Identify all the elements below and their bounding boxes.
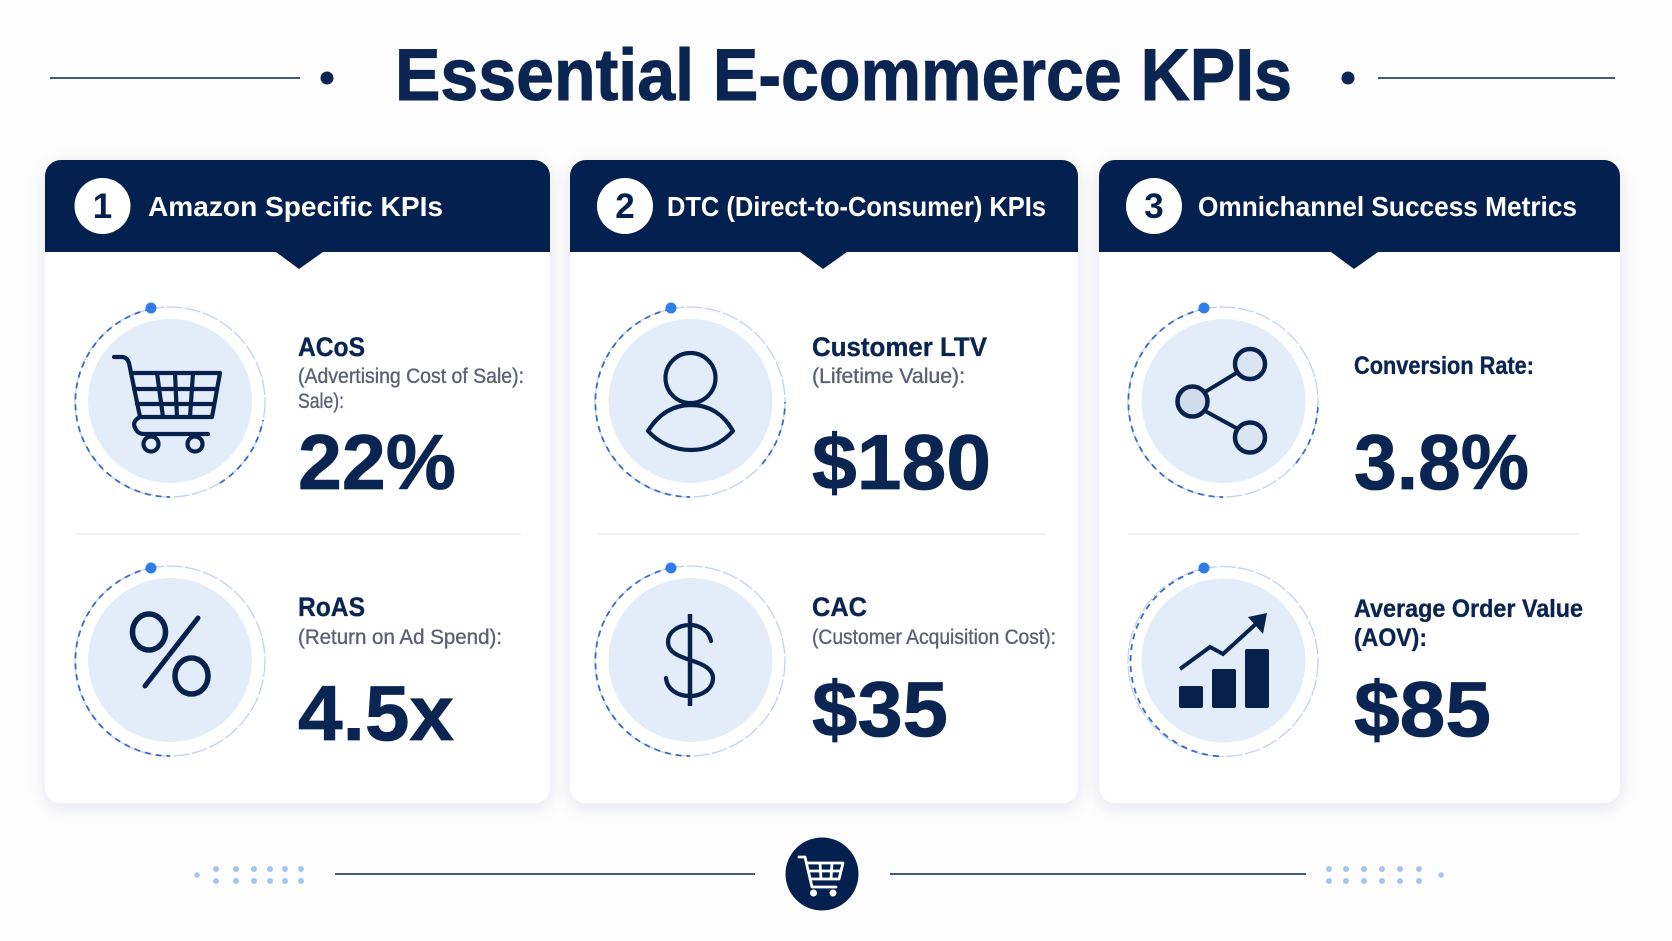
panel header: Amazon: 1: [93, 187, 112, 226]
footer decoration: [194, 838, 1444, 910]
metric: CAC: [812, 592, 1056, 753]
icon: bar chart with arrow: [1128, 562, 1318, 756]
title: [50, 35, 1615, 116]
panel header: Amazon: [45, 160, 550, 269]
icon: percent: [75, 562, 265, 756]
dots: left: [194, 866, 304, 884]
metric: ACoS: (Advertising Cost of Sale):: [298, 365, 524, 388]
panel header: Omnichannel: 3: [1144, 187, 1164, 226]
title: Essential E-commerce KPIs: [395, 35, 1292, 116]
panel header: DTC: 2: [615, 187, 635, 226]
metric: Average Order Value: [1354, 595, 1583, 753]
panel header: DTC: DTC (Direct-to-Consumer) KPIs: [667, 191, 1046, 222]
icon: footer cart badge: [786, 838, 858, 910]
metric: Average Order Value: (AOV):: [1354, 624, 1427, 652]
metric: RoAS: (Return on Ad Spend):: [298, 626, 502, 649]
metric: CAC: $35: [812, 665, 948, 753]
metric: Average Order Value: $85: [1354, 665, 1491, 753]
panel header: Omnichannel: Omnichannel Success Metrics: [1198, 191, 1577, 222]
icon: shopping cart: [75, 302, 265, 497]
metric: RoAS: RoAS: [298, 592, 365, 622]
metric: Customer LTV: [812, 332, 991, 506]
panel header: Amazon: Amazon Specific KPIs: [148, 191, 443, 222]
metric: Customer LTV: (Lifetime Value):: [812, 365, 965, 388]
metric: Customer LTV: Customer LTV: [812, 332, 987, 362]
metric: ACoS: [298, 332, 524, 506]
metric: ACoS: 22%: [298, 418, 456, 506]
metric: ACoS: Sale):: [298, 390, 344, 413]
metric: ACoS: ACoS: [298, 332, 365, 362]
metric: CAC: CAC: [812, 592, 867, 622]
panel header: Omnichannel: [1099, 160, 1620, 269]
metric: Average Order Value: Average Order Value: [1354, 595, 1583, 623]
metric: Conversion Rate: [1354, 352, 1534, 506]
panel: Omnichannel Success Metrics: [1099, 160, 1620, 803]
icon: share nodes: [1128, 302, 1318, 497]
metric: Customer LTV: $180: [812, 418, 991, 506]
panel header: DTC: [570, 160, 1078, 269]
metric: RoAS: [298, 592, 502, 757]
metric: CAC: (Customer Acquisition Cost):: [812, 626, 1056, 649]
icon: person: [595, 302, 785, 497]
metric: RoAS: 4.5x: [298, 669, 454, 757]
metric: Conversion Rate: Conversion Rate:: [1354, 352, 1534, 380]
panel: Amazon Specific KPIs: [45, 160, 550, 803]
metric: Conversion Rate: 3.8%: [1354, 418, 1529, 506]
icon: dollar: [595, 562, 785, 756]
panel: DTC KPIs: [570, 160, 1078, 803]
dots: right: [1326, 866, 1444, 884]
